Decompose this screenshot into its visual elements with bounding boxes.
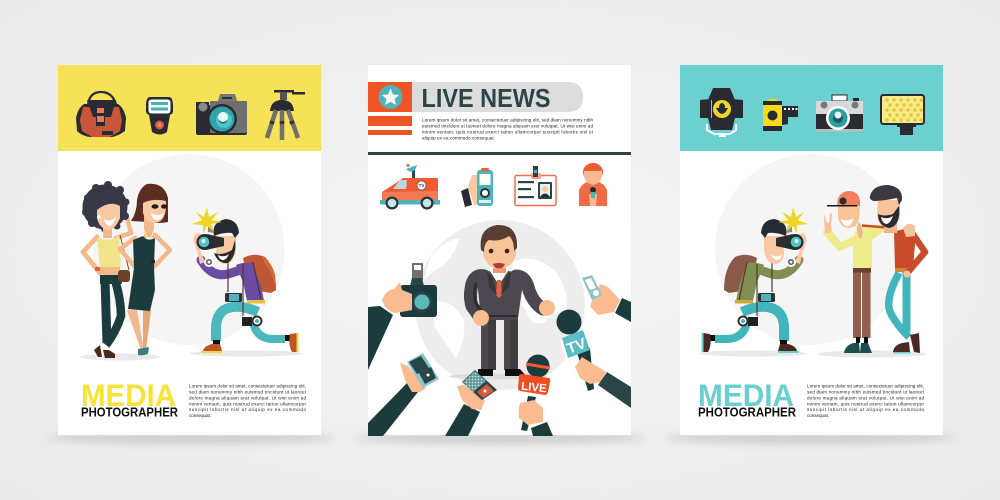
text block: left lorem: sed diam nonummy nibh euismod tincidunt ut laoreet [189, 390, 307, 394]
figure: man with cap, peace sign [824, 191, 884, 353]
icon: led panel [881, 95, 924, 135]
text block: right lorem: dolore magna aliquam erat volutpat. Ut wisi enim ad [807, 395, 924, 400]
text block: right lorem: minim veniam, quis nostrud exerci tation ullamcorper [807, 401, 924, 406]
text block: right lorem: sed diam nonummy nibh euismod tincidunt ut laoreet [807, 390, 925, 394]
text block: middle lorem [422, 118, 594, 141]
text block: middle lorem: minim veniam, quis nostrud exerci tation ullamcorper suscipit lobortis nisl ut [422, 130, 594, 135]
header band: yellow [58, 65, 321, 151]
panel: right flyer [680, 65, 943, 435]
text block: left lorem [189, 384, 307, 418]
icon: tripod [267, 90, 305, 140]
icon: camera bag [76, 92, 126, 137]
icon: tv van: TV [419, 183, 424, 188]
figure: man in suit [470, 225, 555, 376]
title: media photographer, right: PHOTOGRAPHER [698, 406, 796, 420]
text block: left lorem: dolore magna aliquam erat volutpat. Ut wisi enim ad [189, 395, 306, 400]
ground shadows [80, 350, 303, 360]
text block: right lorem [807, 384, 925, 418]
card shadows [45, 432, 956, 444]
hand: live microphone [518, 354, 553, 436]
text block: left lorem: consequat. [189, 413, 211, 418]
title: media photographer, left: PHOTOGRAPHER [81, 406, 178, 420]
hand: dotted recorder [445, 370, 497, 436]
figure: kneeling photographer, purple sweater [192, 207, 298, 353]
background circle [94, 154, 284, 345]
text block: left lorem: minim veniam, quis nostrud exerci tation ullamcorper [189, 401, 306, 406]
hand: tv microphone: TV [565, 335, 588, 358]
figure: woman with afro [82, 181, 131, 358]
text block: middle lorem: euismod tincidunt ut laoreet dolore magna aliquam erat volutpat. Ut wisi enim ad [422, 124, 593, 129]
ground shadows [699, 350, 927, 358]
text block: right lorem: Lorem ipsum dolor sit amet, consectetuer adipiscing elit, [807, 384, 924, 388]
header band: teal [680, 65, 943, 151]
figure: woman with sunglasses [120, 184, 170, 355]
figure: kneeling photographer, olive sweater [702, 207, 808, 353]
text block: left lorem: Lorem ipsum dolor sit amet, consectetuer adipiscing elit, [189, 384, 306, 388]
background circle [715, 154, 906, 345]
panel: middle flyer, live news [368, 65, 631, 436]
title: media photographer, left: MEDIA [81, 377, 176, 413]
icon: barn door light [700, 88, 743, 137]
icon: tv van [380, 164, 440, 210]
hand: tape recorder [368, 353, 439, 436]
header: live news banner: LIVE NEWS [422, 83, 550, 113]
icon: DSLR camera [196, 94, 247, 135]
icon: retro camera [816, 95, 863, 132]
hand: small recorder [582, 275, 631, 322]
text block: right lorem: consequat. [807, 413, 829, 418]
icon: reporter [579, 163, 607, 206]
figure: bearded man, red shirt [862, 185, 925, 354]
panel: left flyer [58, 65, 321, 435]
background: globe [415, 220, 585, 390]
icon: press id card [515, 166, 556, 206]
text block: right lorem: suscipit lobortis nisl ut aliquip ex ea commodo [807, 407, 924, 412]
icon: hand with recorder [461, 168, 493, 207]
hand: live microphone: LIVE [521, 381, 548, 395]
text block: middle lorem: Lorem ipsum dolor sit amet, consectetuer adipiscing elit, sed diam nonummy nibh [422, 118, 593, 123]
title: media photographer, right: MEDIA [698, 377, 794, 413]
text block: left lorem: suscipit lobortis nisl ut aliquip ex ea commodo [189, 407, 306, 412]
icon: film roll [763, 99, 798, 131]
icon: speedlight flash [146, 97, 173, 134]
header: live news banner [368, 82, 583, 135]
hand: tv microphone [556, 310, 631, 408]
text block: middle lorem: aliquip ex ea commodo consequat. [422, 136, 495, 141]
hand: camera [368, 263, 437, 370]
